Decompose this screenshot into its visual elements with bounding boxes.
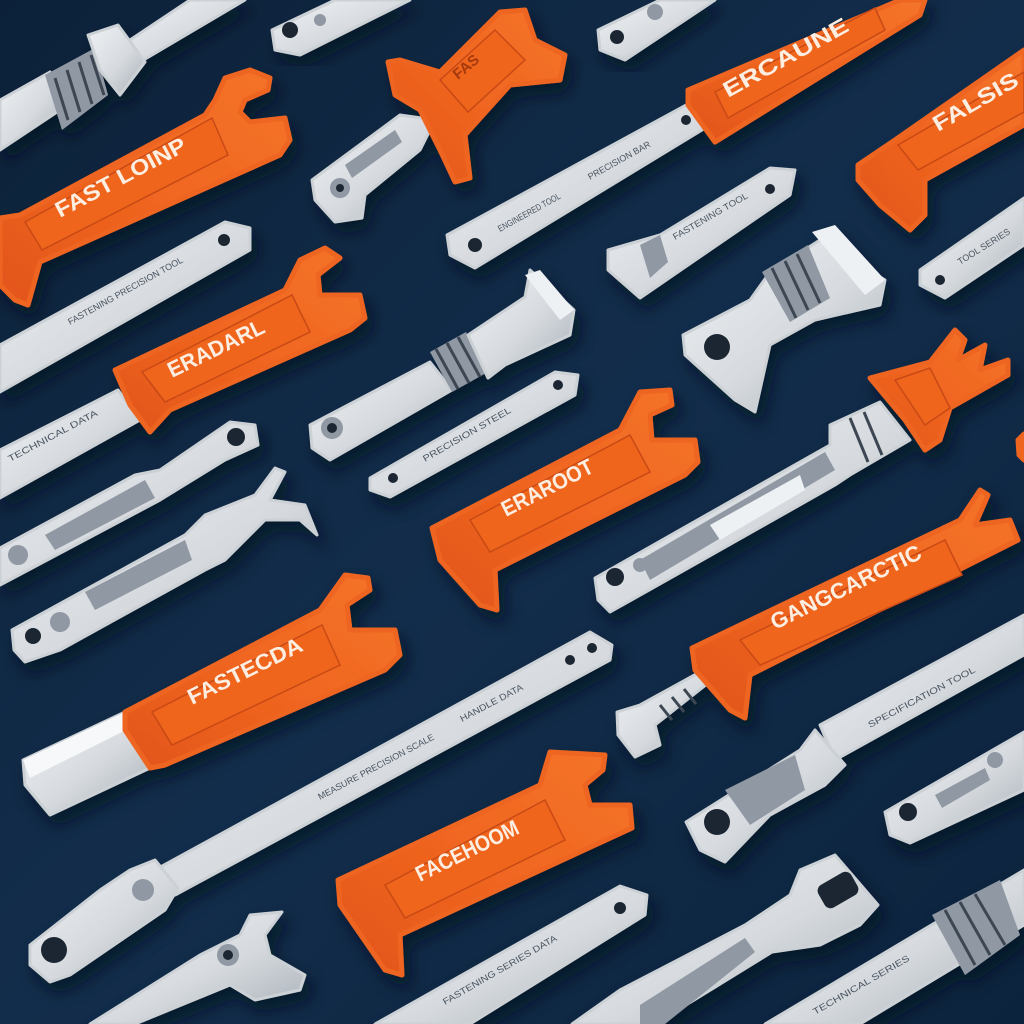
wrench: mid left with strip: ERADARL	[163, 314, 269, 382]
tool: silver clamp top right	[598, 0, 715, 60]
tool: bottom center ratchet	[572, 855, 878, 1024]
silver strip: left	[0, 222, 250, 392]
tool: silver clamp top	[272, 0, 410, 55]
silver strip and orange handle: top right tool: ERCAUNE	[718, 13, 853, 102]
tool: center silver ratchet	[310, 270, 574, 460]
tool: silver wrench top left	[0, 0, 245, 150]
wrench: mid left with strip: TECHNICAL DATA	[6, 408, 99, 464]
tool: silver strip right	[686, 615, 1024, 862]
wrench: long right GANGCARCTIC	[617, 490, 1018, 757]
tool: long silver ruler strip: MEASURE PRECISION SCALE	[316, 732, 436, 802]
silver strip: right edge: TOOL SERIES	[956, 226, 1012, 267]
tool: long silver ruler strip	[30, 632, 612, 982]
wrench: FAST LOINP: FAST LOINP	[51, 132, 190, 222]
tool: bottom left spanner	[90, 912, 305, 1024]
tool: left silver spanner	[12, 468, 317, 662]
silver strip: left: FASTENING PRECISION TOOL	[66, 255, 185, 327]
tool: long silver ruler strip: HANDLE DATA	[458, 682, 525, 724]
silver strip and orange handle: top right tool: ENGINEERED TOOL	[496, 191, 562, 234]
silver strip and orange handle: top right tool	[447, 0, 925, 268]
tool: right silver clamp block	[683, 225, 885, 412]
wrench: top center with clamp: FAS	[450, 51, 483, 83]
wrench: FACEHOOM: FACEHOOM	[411, 815, 523, 886]
silver strip: center small	[370, 372, 578, 497]
wrench: top center with clamp	[312, 10, 565, 222]
silver strip: upper middle	[608, 168, 795, 298]
tool: silver clamp right edge	[885, 732, 1024, 843]
silver strip and orange handle: top right tool: PRECISION BAR	[586, 139, 653, 182]
silver strip: center small: PRECISION STEEL	[421, 405, 513, 464]
wrench: FAST LOINP	[0, 70, 290, 305]
wrench: mid left with strip	[0, 248, 365, 498]
wrench: top right: FALSIS	[928, 67, 1023, 136]
wrench: ERAROOT center: ERAROOT	[497, 454, 598, 521]
orange fragment: right edge	[1018, 434, 1024, 460]
tool: left silver bar	[0, 422, 258, 585]
wrench: ERAROOT center	[432, 390, 698, 610]
tool: silver strip right: SPECIFICATION TOOL	[866, 665, 977, 730]
tool: bottom right strip with clamp: TECHNICAL SERIES	[811, 953, 911, 1017]
wrench: FASTECDA: FASTECDA	[183, 632, 307, 709]
silver strip: bottom center	[375, 886, 647, 1024]
silver strip: right edge	[920, 198, 1024, 298]
tool: bottom right strip with clamp	[765, 870, 1024, 1024]
silver strip: bottom center: FASTENING SERIES DATA	[441, 933, 559, 1007]
tool: long silver ratchet with orange head	[595, 330, 1008, 612]
wrench: top right	[858, 50, 1024, 230]
wrench: FACEHOOM	[338, 752, 632, 975]
wrench: FASTECDA	[23, 575, 400, 815]
wrench: long right GANGCARCTIC: GANGCARCTIC	[766, 540, 926, 634]
silver strip: upper middle: FASTENING TOOL	[671, 191, 750, 242]
